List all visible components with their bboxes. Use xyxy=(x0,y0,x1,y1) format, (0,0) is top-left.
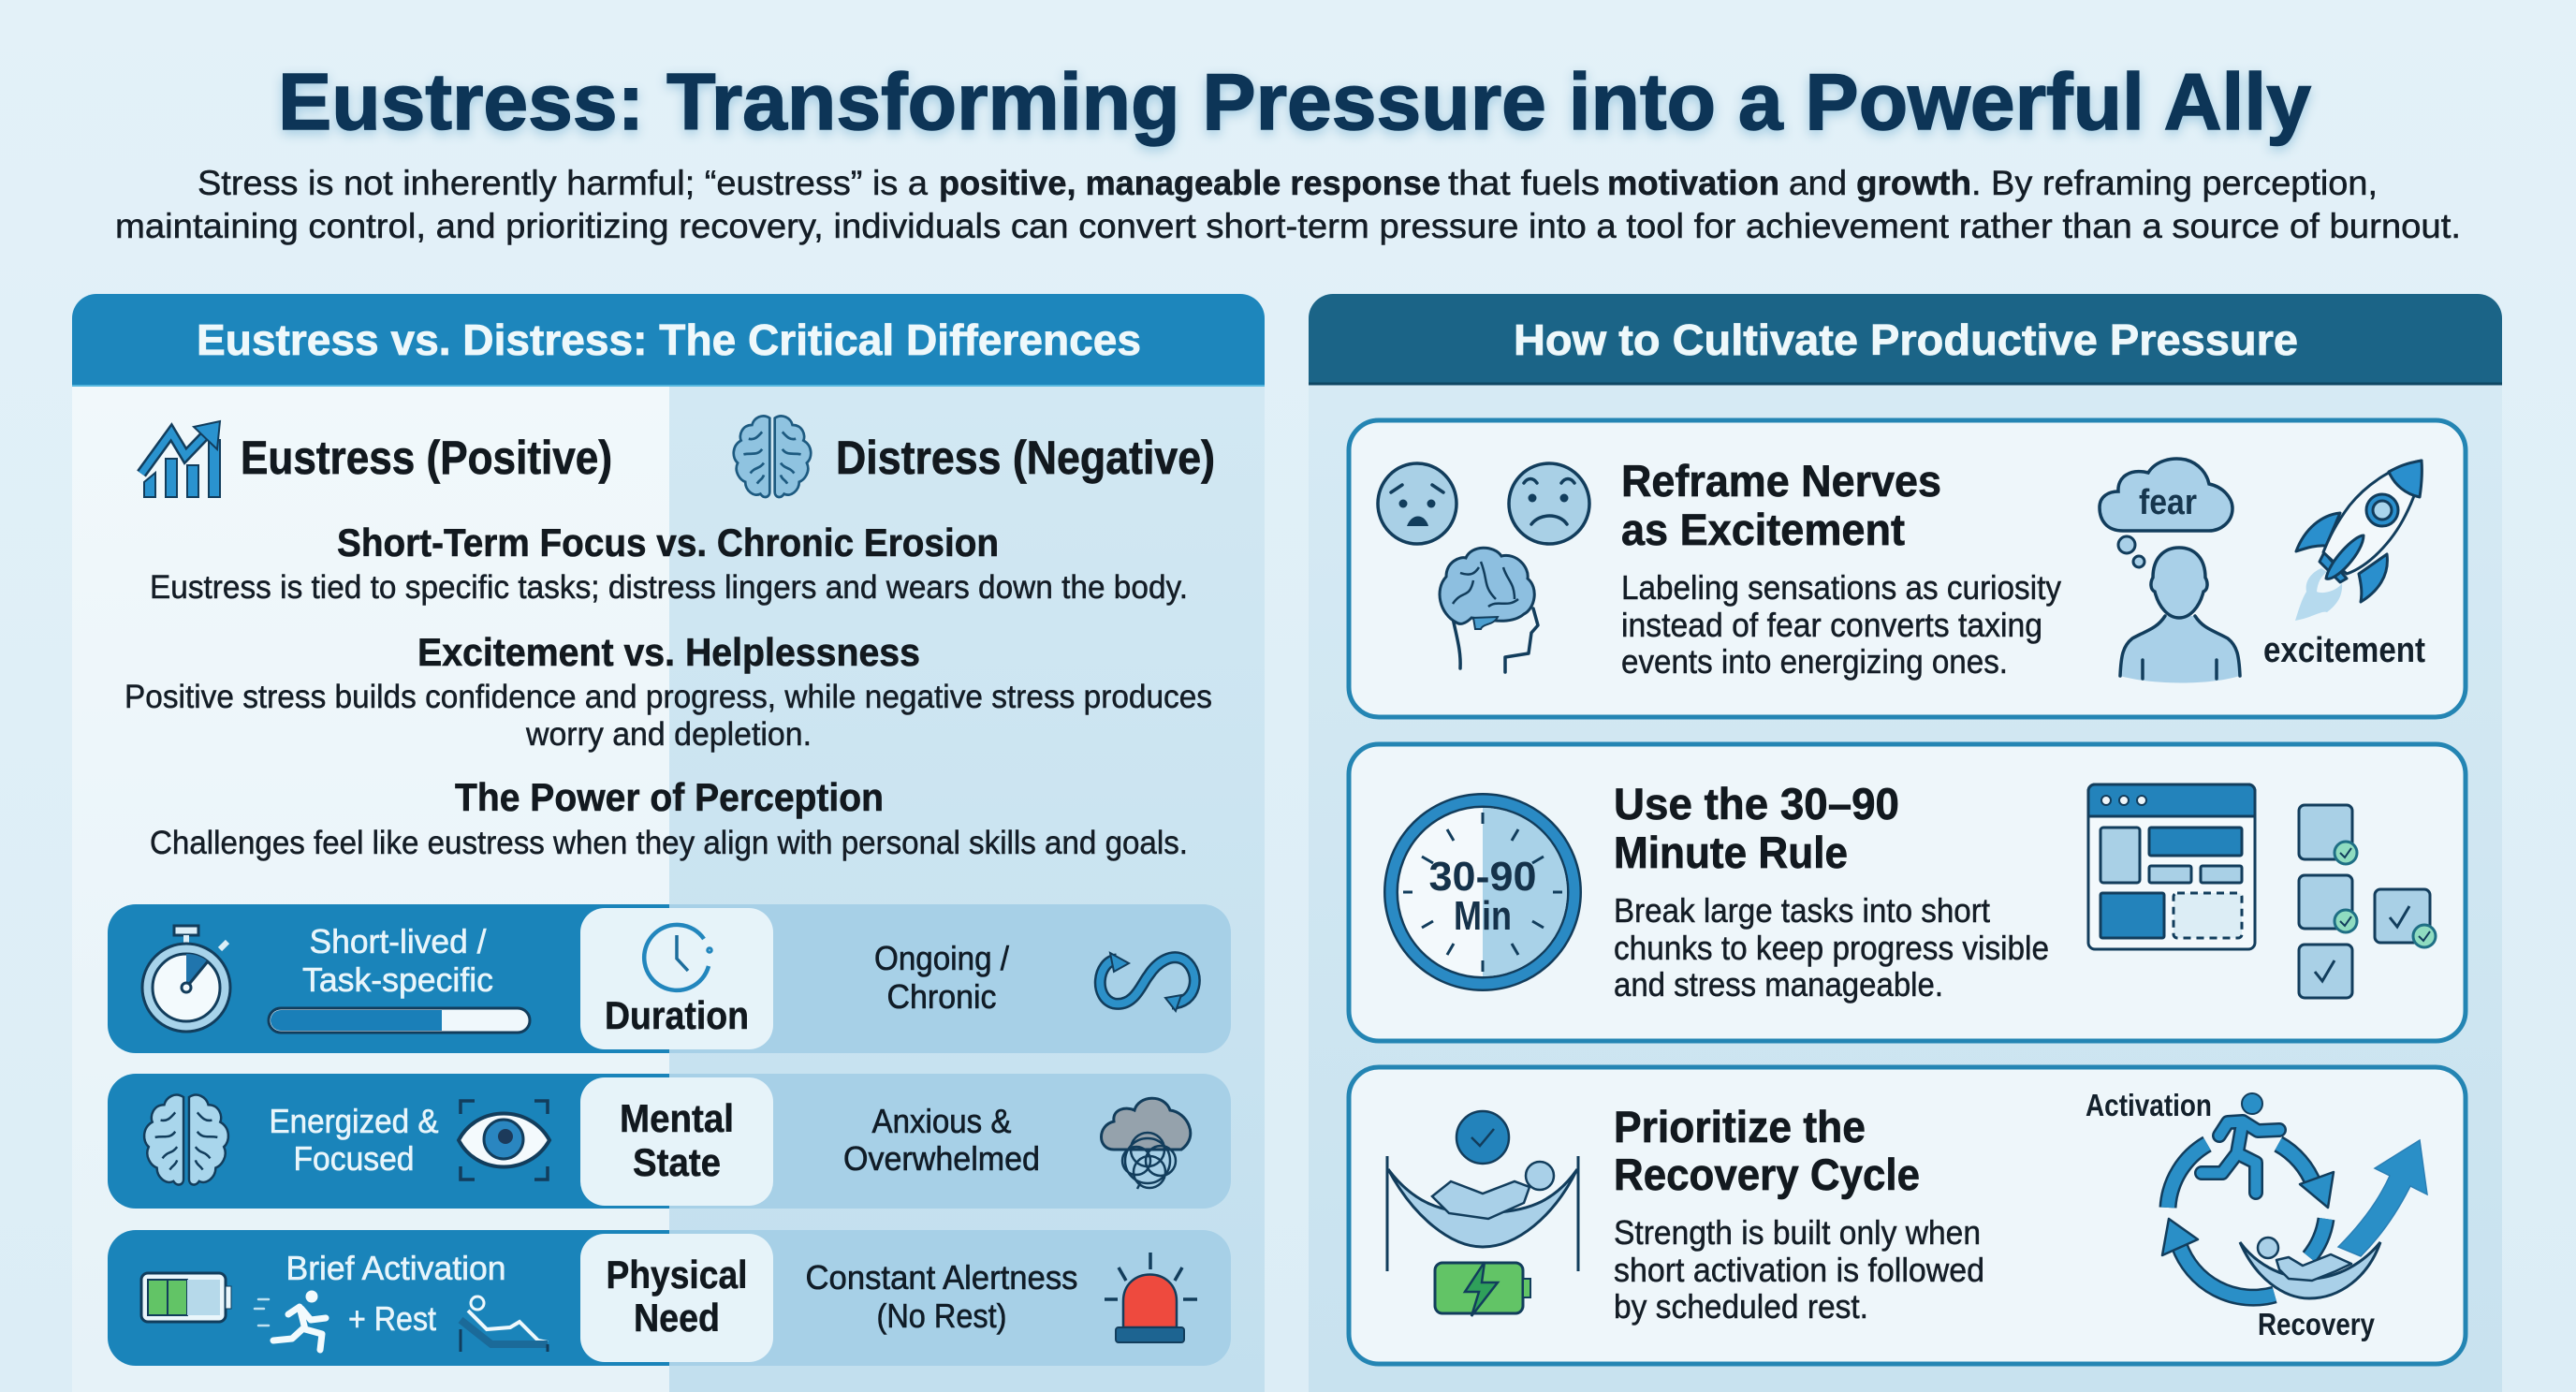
body text: Break large tasks into short xyxy=(1614,891,1990,930)
subtitle: motivation xyxy=(1607,164,1779,202)
panel header: How to Cultivate Productive Pressure xyxy=(1514,315,2298,364)
panel body xyxy=(1309,384,2502,1392)
icon: fear cloud and person xyxy=(2100,459,2240,683)
text: anxious xyxy=(843,1102,1040,1178)
panel header xyxy=(1309,294,2502,385)
text: constant alertness: (No Rest) xyxy=(876,1297,1007,1335)
label: recovery: Recovery xyxy=(2258,1307,2376,1341)
body text xyxy=(1614,1213,1984,1326)
panel body right half xyxy=(669,384,1265,1392)
text block: short-term focus: Short-Term Focus vs. Chronic Erosion xyxy=(337,520,999,564)
subtitle: positive, manageable response xyxy=(939,164,1441,202)
icon: rising chart xyxy=(141,421,220,497)
pill: duration label: Duration xyxy=(605,993,749,1037)
text: constant alertness: Constant Alertness xyxy=(805,1258,1078,1297)
icon: app window xyxy=(2088,784,2255,949)
label: activation: Activation xyxy=(2086,1088,2212,1122)
heading xyxy=(1614,1102,1920,1199)
body text: Labeling sensations as curiosity xyxy=(1621,568,2061,607)
row: mental state xyxy=(108,1074,1231,1209)
heading xyxy=(1621,456,1941,554)
icon: task tiles with checks xyxy=(2299,805,2436,998)
text: ongoing: Chronic xyxy=(887,977,996,1016)
icon: stopwatch xyxy=(142,926,230,1032)
icon: clock xyxy=(644,925,711,990)
icon: red siren xyxy=(1105,1253,1197,1342)
panel body left half xyxy=(72,384,669,1392)
icon: 30-90 min clock: Min xyxy=(1454,893,1512,939)
text block: short-term focus: Eustress is tied to specific tasks; distress lingers and wears down the body. xyxy=(150,569,1188,606)
heading: Prioritize the xyxy=(1614,1102,1866,1151)
heading xyxy=(1614,779,1899,877)
pill: mental state label: State xyxy=(633,1140,721,1184)
subtitle xyxy=(115,164,2461,245)
body text: by scheduled rest. xyxy=(1614,1287,1868,1326)
icon: infinity loop xyxy=(1100,953,1194,1011)
subtitle: . By reframing perception, xyxy=(1971,164,2378,202)
body text xyxy=(1614,891,2049,1004)
text block: excitement vs helplessness: Positive stress builds confidence and progress, while negative stress produces xyxy=(124,679,1212,715)
subtitle: maintaining control, and prioritizing recovery, individuals can convert short-term pressure into a tool for achievement rather than a source of burnout. xyxy=(115,207,2461,245)
text block: power of perception: Challenges feel like eustress when they align with personal skills and goals. xyxy=(150,825,1188,861)
icon: head with brain xyxy=(1440,548,1538,672)
row: duration xyxy=(108,904,1231,1053)
body text: events into energizing ones. xyxy=(1621,642,2008,681)
text: short-lived: Short-lived / xyxy=(309,922,487,960)
pill: duration label xyxy=(580,908,773,1049)
icon: runner white xyxy=(255,1292,326,1350)
card: reframe nerves xyxy=(1349,420,2466,717)
text: anxious: Overwhelmed xyxy=(843,1139,1040,1178)
heading: Minute Rule xyxy=(1614,828,1848,877)
body text: short activation is followed xyxy=(1614,1251,1984,1289)
text: short-lived: Task-specific xyxy=(302,960,493,999)
heading: distress negative: Distress (Negative) xyxy=(836,432,1215,484)
text: ongoing: Ongoing / xyxy=(874,939,1009,977)
text block: power of perception: The Power of Perception xyxy=(455,775,884,819)
pill: mental state label: Mental xyxy=(620,1096,734,1140)
text: energized xyxy=(270,1102,438,1178)
text block: excitement vs helplessness xyxy=(124,630,1212,753)
pill: physical need label xyxy=(580,1234,773,1362)
subtitle: that fuels xyxy=(1448,164,1600,202)
panel: eustress vs distress xyxy=(72,294,1265,1392)
heading: Reframe Nerves xyxy=(1621,456,1941,506)
pill: mental state label xyxy=(580,1077,773,1206)
icon: storm cloud scribble xyxy=(1101,1098,1191,1189)
icon: fear cloud and person: fear xyxy=(2139,483,2197,522)
body text: Strength is built only when xyxy=(1614,1213,1981,1252)
text block: excitement vs helplessness: worry and depletion. xyxy=(525,716,812,753)
body text xyxy=(1621,568,2061,681)
body text: and stress manageable. xyxy=(1614,965,1943,1004)
text block: short-term focus xyxy=(150,520,1188,606)
body text: instead of fear converts taxing xyxy=(1621,606,2042,644)
icon: battery xyxy=(141,1273,231,1322)
text: brief activation: Brief Activation xyxy=(286,1249,505,1287)
icon: charging battery xyxy=(1435,1262,1530,1316)
icon: brain light xyxy=(144,1095,228,1185)
icon: worried face xyxy=(1378,463,1456,544)
icon: rocket xyxy=(2295,461,2422,621)
panel: cultivate productive pressure xyxy=(1309,294,2502,1392)
body text: chunks to keep progress visible xyxy=(1614,929,2049,967)
icon: 30-90 min clock xyxy=(1391,800,1574,984)
subtitle: growth xyxy=(1856,164,1971,202)
icon: activation recovery cycle xyxy=(2162,1093,2427,1298)
pill: physical need label: Need xyxy=(634,1296,720,1340)
heading: as Excitement xyxy=(1621,505,1905,554)
text: energized: Energized & xyxy=(270,1102,438,1140)
subtitle: Stress is not inherently harmful; “eustress” is a xyxy=(198,164,928,202)
pill: physical need label: Physical xyxy=(607,1253,747,1297)
heading: eustress positive: Eustress (Positive) xyxy=(241,432,612,484)
text: energized: Focused xyxy=(294,1139,414,1178)
icon: lounger xyxy=(461,1297,548,1352)
text block: power of perception xyxy=(150,775,1188,861)
row: physical need xyxy=(108,1230,1231,1366)
text: constant alertness xyxy=(805,1258,1078,1335)
card: 30-90 minute rule xyxy=(1349,744,2466,1041)
label: excitement: excitement xyxy=(2263,631,2425,670)
icon: focused eye xyxy=(459,1101,549,1180)
heading: Recovery Cycle xyxy=(1614,1150,1920,1199)
text: anxious: Anxious & xyxy=(872,1102,1011,1140)
text block: excitement vs helplessness: Excitement vs. Helplessness xyxy=(417,630,920,674)
heading: Use the 30–90 xyxy=(1614,779,1899,828)
subtitle: and xyxy=(1789,164,1847,202)
card: recovery cycle xyxy=(1349,1067,2466,1364)
text: ongoing xyxy=(874,939,1009,1016)
panel header: Eustress vs. Distress: The Critical Differences xyxy=(197,315,1141,364)
text: plus rest: + Rest xyxy=(348,1299,436,1338)
progress bar xyxy=(269,1008,530,1033)
icon: 30-90 min clock: 30-90 xyxy=(1428,854,1537,900)
icon: hammock with check xyxy=(1387,1111,1578,1271)
title: Eustress: Transforming Pressure into a Powerful Ally xyxy=(278,58,2311,147)
icon: sad face xyxy=(1509,463,1589,544)
panel header xyxy=(72,294,1265,386)
text: short-lived xyxy=(302,922,493,999)
icon: brain xyxy=(734,416,811,497)
